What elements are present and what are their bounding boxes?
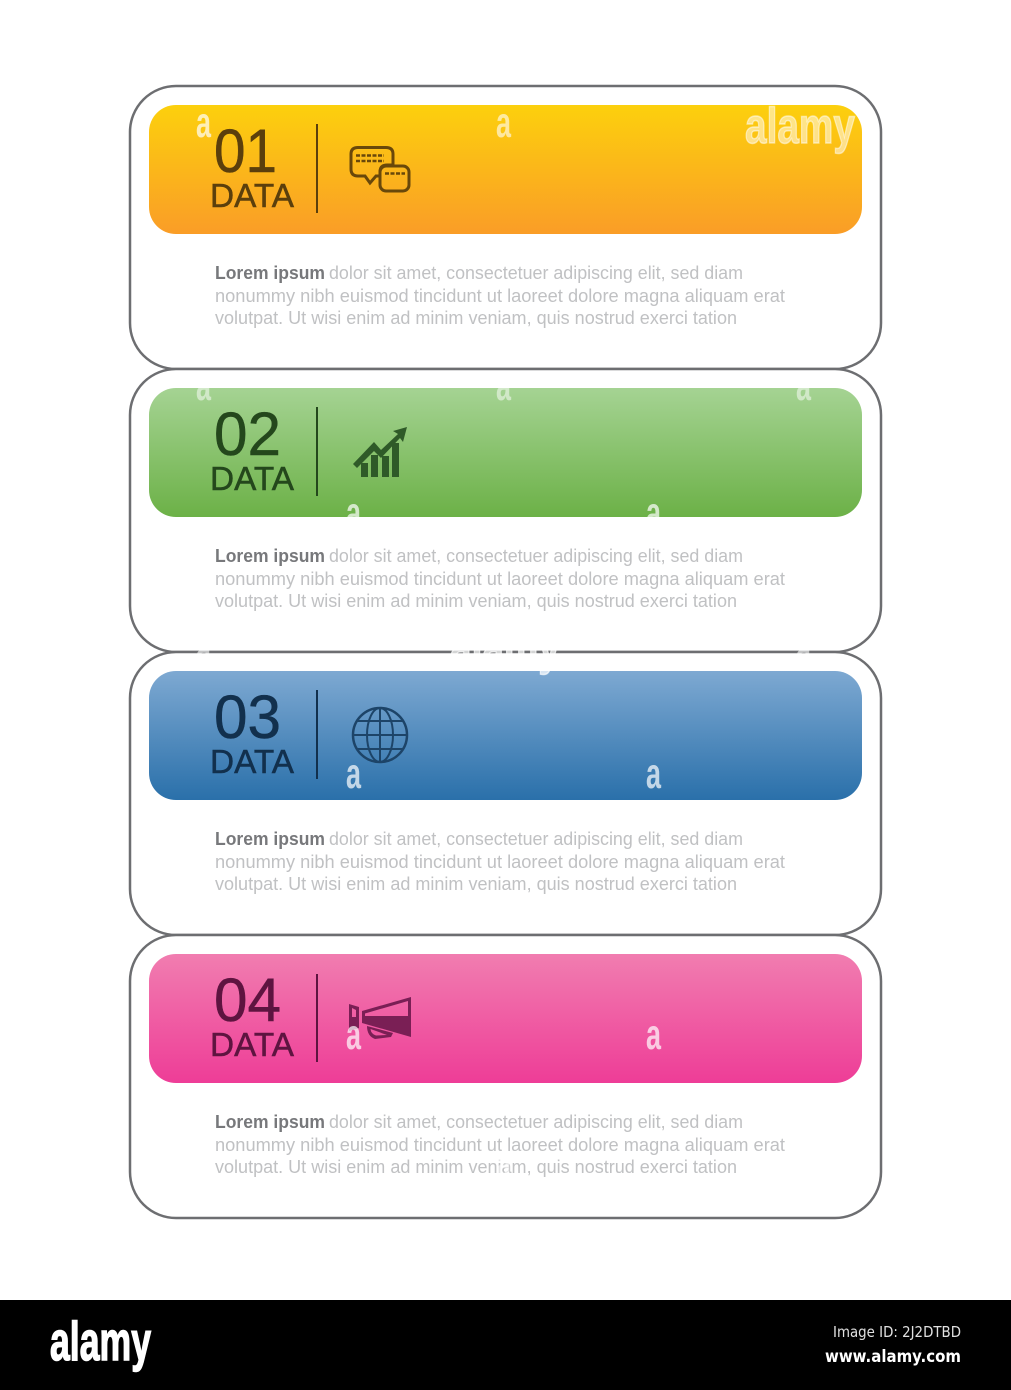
panel: 01 data [130, 86, 881, 369]
watermark marks [196, 98, 855, 1188]
watermark marks: alamy [450, 619, 560, 675]
watermark marks: alamy [745, 98, 855, 154]
body text 03: volutpat. Ut wisi enim ad minim veniam, quis nostrud exerci tation [215, 873, 737, 894]
number 01: 01 [214, 117, 277, 185]
watermark marks: a [646, 1011, 662, 1059]
icon: megaphone [349, 997, 411, 1039]
watermark marks: a [496, 99, 512, 147]
body text 01: Lorem ipsum [215, 262, 325, 283]
body text 04: nonummy nibh euismod tincidunt ut laoreet dolore magna aliquam erat [215, 1134, 785, 1155]
watermark marks: a [496, 1140, 512, 1188]
label DATA 02: DATA [210, 460, 294, 497]
divider 01 [316, 124, 318, 213]
panel outline 01 [130, 86, 881, 369]
label DATA 01: DATA [210, 177, 294, 214]
watermark marks: a [196, 99, 212, 147]
label DATA 03: DATA [210, 743, 294, 780]
watermark marks: a [646, 489, 662, 537]
watermark marks: a [796, 362, 812, 410]
body text 04 [215, 1111, 785, 1177]
number 04: 04 [214, 966, 281, 1034]
watermark marks: a [796, 625, 812, 673]
body text 02 [215, 545, 785, 611]
website: www.alamy.com [825, 1347, 961, 1367]
body text 02: volutpat. Ut wisi enim ad minim veniam, quis nostrud exerci tation [215, 590, 737, 611]
panel: 04 data [130, 935, 881, 1218]
number 03: 03 [214, 683, 281, 751]
label DATA 04: DATA [210, 1026, 294, 1063]
icon: speech bubbles [351, 148, 409, 191]
body text 02: dolor sit amet, consectetuer adipiscing elit, sed diam [329, 545, 743, 566]
body text 03 [215, 828, 785, 894]
watermark marks: a [346, 1011, 362, 1059]
colour band 02 [149, 388, 862, 517]
body text 01: nonummy nibh euismod tincidunt ut laoreet dolore magna aliquam erat [215, 285, 785, 306]
colour band 03 [149, 671, 862, 800]
body text 03: nonummy nibh euismod tincidunt ut laoreet dolore magna aliquam erat [215, 851, 785, 872]
panel: 02 data [130, 369, 881, 652]
body text 01: volutpat. Ut wisi enim ad minim veniam, quis nostrud exerci tation [215, 307, 737, 328]
colour band 01 [149, 105, 862, 234]
divider 03 [316, 690, 318, 779]
body text 04: Lorem ipsum [215, 1111, 325, 1132]
panel outline 02 [130, 369, 881, 652]
watermark marks: a [496, 362, 512, 410]
body text 03: dolor sit amet, consectetuer adipiscing elit, sed diam [329, 828, 743, 849]
panel: 03 data [130, 652, 881, 935]
icon: growth chart [353, 427, 407, 477]
panel outline 04 [130, 935, 881, 1218]
body text 01: dolor sit amet, consectetuer adipiscing elit, sed diam [329, 262, 743, 283]
watermark marks: a [346, 750, 362, 798]
watermark marks: a [646, 750, 662, 798]
panel outline 03 [130, 652, 881, 935]
footer bar [0, 1300, 1011, 1390]
divider 04 [316, 974, 318, 1062]
body text 02: Lorem ipsum [215, 545, 325, 566]
watermark marks: a [346, 489, 362, 537]
body text 03: Lorem ipsum [215, 828, 325, 849]
watermark marks: a [196, 362, 212, 410]
footer logo: alamy [50, 1310, 151, 1372]
divider 02 [316, 407, 318, 496]
image id: Image ID: 2J2DTBD [833, 1323, 961, 1341]
body text 01 [215, 262, 785, 328]
body text 02: nonummy nibh euismod tincidunt ut laoreet dolore magna aliquam erat [215, 568, 785, 589]
body text 04: dolor sit amet, consectetuer adipiscing elit, sed diam [329, 1111, 743, 1132]
watermark marks: a [196, 625, 212, 673]
colour band 04 [149, 954, 862, 1083]
body text 04: volutpat. Ut wisi enim ad minim veniam, quis nostrud exerci tation [215, 1156, 737, 1177]
icon: globe [353, 708, 407, 762]
number 02: 02 [214, 400, 281, 468]
